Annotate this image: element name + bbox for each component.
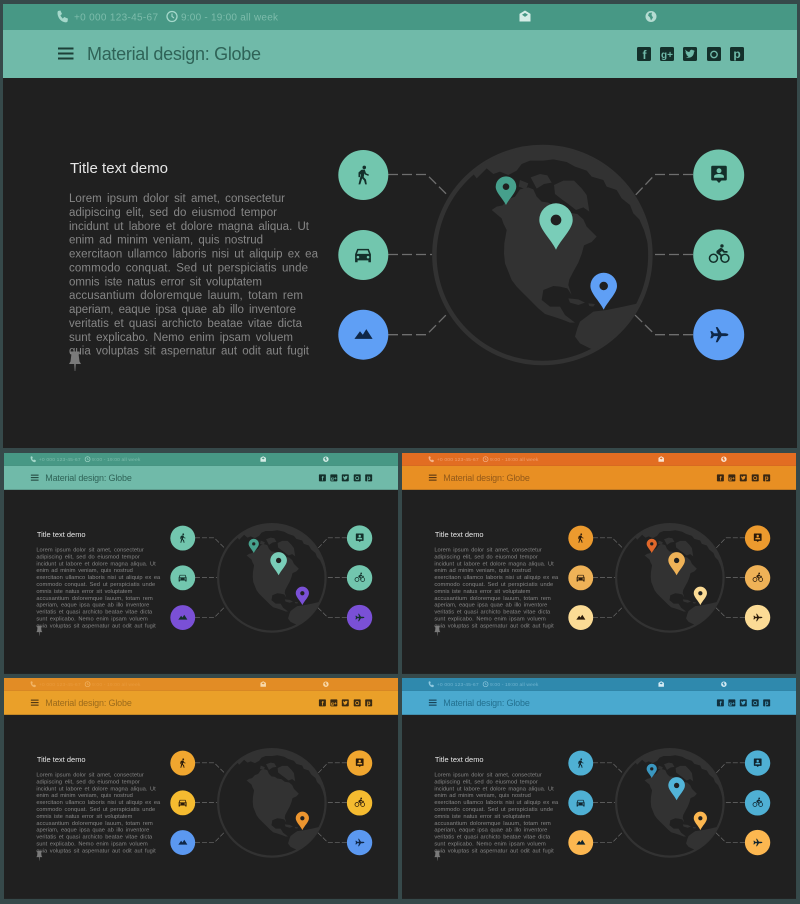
header bar: f — [322, 476, 324, 482]
text block: Lorem ipsum dolor sit amet, consectetur — [36, 773, 144, 779]
text block: omnis iste natus error sit voluptatem — [36, 589, 133, 595]
text block: incidunt ut labore et dolore magna aliqua. Ut — [434, 786, 554, 792]
dashed connectors — [593, 763, 745, 843]
header bar: Material design: Globe — [443, 698, 530, 708]
map pins — [496, 176, 617, 310]
top contact bar: 9:00 - 19:00 all week — [490, 457, 539, 463]
panel: main teal slide — [3, 4, 797, 448]
text block: quia voluptas sit aspernatur aut odit aut fugit — [36, 848, 156, 854]
text block: sunt explicabo. Nemo enim ipsam voluem — [36, 617, 148, 623]
panel: orange slide — [402, 453, 796, 674]
text block: exercitaon ullamco laboris nisi ut aliquip ex ea — [69, 248, 319, 260]
panel: teal and purple slide — [4, 453, 398, 674]
text block: Lorem ipsum dolor sit amet, consectetur — [434, 548, 542, 554]
header bar — [3, 30, 797, 78]
text block: adipiscing elit, sed do eiusmod tempor — [36, 554, 140, 560]
header bar: p — [765, 701, 769, 707]
text block: Title text demo — [435, 530, 484, 539]
text block: exercitaon ullamco laboris nisi ut aliquip ex ea — [36, 575, 161, 581]
text block: quia voluptas sit aspernatur aut odit aut fugit — [434, 623, 554, 629]
text block — [36, 755, 161, 854]
top contact bar: +0 000 123-45-67 — [39, 457, 81, 463]
header bar — [402, 691, 796, 715]
text block: Title text demo — [435, 755, 484, 764]
top contact bar: 9:00 - 19:00 all week — [92, 457, 141, 463]
text block — [36, 530, 161, 629]
icon: pushpin — [434, 626, 440, 636]
text block: commodo conquat. Sed ut perspiciatis unde — [434, 582, 553, 588]
text block: enim ad minim veniam, quis nostrud — [36, 793, 133, 799]
text block: incidunt ut labore et dolore magna aliqua. Ut — [434, 561, 554, 567]
text block: incidunt ut labore et dolore magna aliqua. Ut — [69, 221, 310, 233]
header bar: f — [642, 48, 648, 62]
text block: adipiscing elit, sed do eiusmod tempor — [434, 779, 538, 785]
text block: Title text demo — [37, 755, 86, 764]
text block: omnis iste natus error sit voluptatem — [434, 814, 531, 820]
top contact bar: +0 000 123-45-67 — [437, 457, 479, 463]
text block: commodo conquat. Sed ut perspiciatis unde — [36, 582, 155, 588]
text block: omnis iste natus error sit voluptatem — [69, 276, 262, 288]
top contact bar — [402, 678, 796, 691]
top contact bar: 9:00 - 19:00 all week — [92, 682, 141, 688]
text block: quia voluptas sit aspernatur aut odit aut fugit — [36, 623, 156, 629]
globe map — [616, 742, 728, 857]
icon circles — [568, 750, 770, 855]
globe map — [434, 133, 658, 363]
header bar: p — [765, 476, 769, 482]
header bar: g+ — [729, 702, 735, 707]
panel: amber slide — [4, 678, 398, 899]
text block: aperiam, eaque ipsa quae ab illo inventore — [434, 603, 547, 609]
text block: sunt explicabo. Nemo enim ipsam voluem — [36, 842, 148, 848]
text block: veritatis et quasi archicto beatae vitae dicta — [434, 610, 551, 616]
text block: aperiam, eaque ipsa quae ab illo inventore — [69, 304, 296, 316]
top contact bar: +0 000 123-45-67 — [74, 12, 158, 24]
top contact bar — [3, 4, 797, 30]
text block: exercitaon ullamco laboris nisi ut aliquip ex ea — [434, 800, 559, 806]
icon: pushpin — [434, 851, 440, 861]
header bar: f — [720, 701, 722, 707]
text block: quia voluptas sit aspernatur aut odit aut fugit — [434, 848, 554, 854]
map pins — [647, 764, 707, 830]
text block: veritatis et quasi archicto beatae vitae dicta — [434, 835, 551, 841]
header bar: p — [367, 701, 371, 707]
text block: commodo conquat. Sed ut perspiciatis unde — [69, 262, 308, 274]
text block: commodo conquat. Sed ut perspiciatis unde — [434, 807, 553, 813]
text block: enim ad minim veniam, quis nostrud — [434, 793, 531, 799]
header bar: p — [367, 476, 371, 482]
icon circles — [170, 525, 372, 630]
header bar — [402, 466, 796, 490]
text block: incidunt ut labore et dolore magna aliqua. Ut — [36, 561, 156, 567]
text block: commodo conquat. Sed ut perspiciatis unde — [36, 807, 155, 813]
top contact bar: +0 000 123-45-67 — [437, 682, 479, 688]
header bar: f — [322, 701, 324, 707]
dashed connectors — [195, 763, 347, 843]
text block: veritatis et quasi archicto beatae vitae dicta — [36, 610, 153, 616]
text block: accusantium doloremque lauum, totam rem — [434, 596, 551, 602]
text block: exercitaon ullamco laboris nisi ut aliquip ex ea — [36, 800, 161, 806]
dashed connectors — [593, 538, 745, 618]
header bar: g+ — [661, 50, 673, 61]
globe map — [616, 517, 728, 632]
text block: veritatis et quasi archicto beatae vitae dicta — [36, 835, 153, 841]
text block: omnis iste natus error sit voluptatem — [434, 589, 531, 595]
top contact bar: +0 000 123-45-67 — [39, 682, 81, 688]
text block: Title text demo — [70, 160, 168, 177]
top contact bar — [4, 678, 398, 691]
map pins — [249, 539, 309, 605]
text block: sunt explicabo. Nemo enim ipsam voluem — [69, 332, 293, 344]
text block: exercitaon ullamco laboris nisi ut aliquip ex ea — [434, 575, 559, 581]
header bar: Material design: Globe — [45, 473, 132, 483]
header bar: g+ — [729, 477, 735, 482]
text block: accusantium doloremque lauum, totam rem — [36, 596, 153, 602]
header bar: Material design: Globe — [45, 698, 132, 708]
header bar: g+ — [331, 702, 337, 707]
header bar — [4, 691, 398, 715]
text block: quia voluptas sit aspernatur aut odit aut fugit — [69, 346, 310, 358]
text block: omnis iste natus error sit voluptatem — [36, 814, 133, 820]
top contact bar — [402, 453, 796, 466]
text block: enim ad minim veniam, quis nostrud — [434, 568, 531, 574]
text block: enim ad minim veniam, quis nostrud — [36, 568, 133, 574]
text block: accusantium doloremque lauum, totam rem — [69, 290, 303, 302]
dashed connectors — [195, 538, 347, 618]
icon circles — [170, 750, 372, 855]
text block: Lorem ipsum dolor sit amet, consectetur — [36, 548, 144, 554]
text block: Lorem ipsum dolor sit amet, consectetur — [69, 193, 285, 205]
text block: enim ad minim veniam, quis nostrud — [69, 235, 263, 247]
dashed connectors — [388, 174, 693, 335]
text block: Title text demo — [37, 530, 86, 539]
header bar: Material design: Globe — [443, 473, 530, 483]
text block: adipiscing elit, sed do eiusmod tempor — [69, 207, 277, 219]
globe map — [218, 742, 330, 857]
text block — [434, 755, 559, 854]
icon circles — [568, 525, 770, 630]
text block: adipiscing elit, sed do eiusmod tempor — [434, 554, 538, 560]
text block — [434, 530, 559, 629]
text block: incidunt ut labore et dolore magna aliqua. Ut — [36, 786, 156, 792]
icon: pushpin — [36, 626, 42, 636]
text block: aperiam, eaque ipsa quae ab illo inventore — [36, 603, 149, 609]
top contact bar — [4, 453, 398, 466]
header bar: g+ — [331, 477, 337, 482]
map pins — [647, 539, 707, 605]
header bar: Material design: Globe — [87, 44, 261, 64]
text block: adipiscing elit, sed do eiusmod tempor — [36, 779, 140, 785]
text block: aperiam, eaque ipsa quae ab illo inventore — [36, 828, 149, 834]
panel: blue slide — [402, 678, 796, 899]
text block — [69, 160, 319, 358]
text block: aperiam, eaque ipsa quae ab illo inventore — [434, 828, 547, 834]
text block: sunt explicabo. Nemo enim ipsam voluem — [434, 617, 546, 623]
icon circles — [338, 150, 744, 360]
header bar: p — [733, 47, 741, 61]
header bar: f — [720, 476, 722, 482]
text block: accusantium doloremque lauum, totam rem — [434, 821, 551, 827]
globe map — [218, 517, 330, 632]
map pin — [296, 812, 309, 830]
text block: accusantium doloremque lauum, totam rem — [36, 821, 153, 827]
icon: pushpin — [36, 851, 42, 861]
text block: Lorem ipsum dolor sit amet, consectetur — [434, 773, 542, 779]
text block: sunt explicabo. Nemo enim ipsam voluem — [434, 842, 546, 848]
header bar — [4, 466, 398, 490]
icon: pushpin — [69, 352, 81, 371]
top contact bar: 9:00 - 19:00 all week — [490, 682, 539, 688]
top contact bar: 9:00 - 19:00 all week — [181, 12, 279, 24]
text block: veritatis et quasi archicto beatae vitae dicta — [69, 318, 303, 330]
